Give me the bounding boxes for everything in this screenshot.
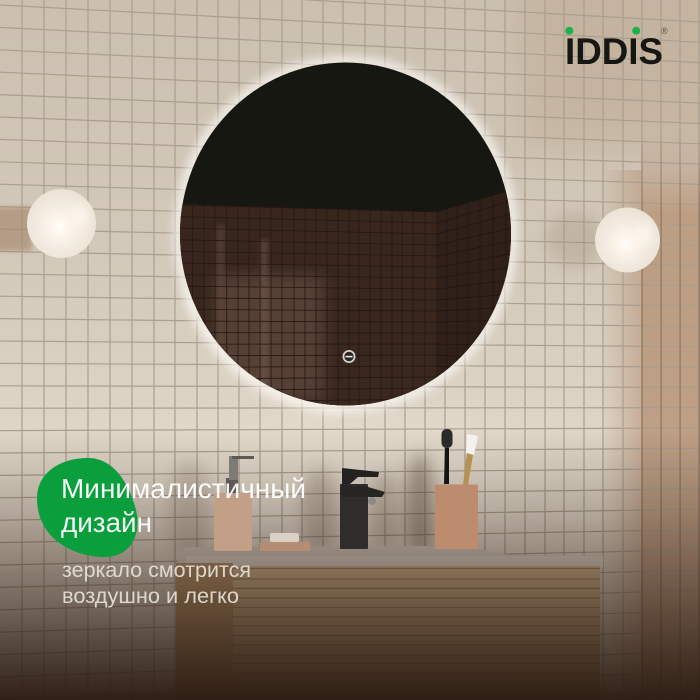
mirror reflection: side wall [437, 192, 511, 377]
heading: дизайн [61, 507, 152, 538]
vanity countertop [176, 546, 603, 568]
round mirror [170, 62, 520, 420]
mirror touch button [343, 351, 355, 362]
toothbrush: black [442, 429, 452, 484]
toothbrush: bamboo [463, 434, 478, 485]
heading: Минималистичный [61, 473, 306, 504]
subheading: зеркало смотрится [62, 559, 251, 582]
logo green dots [565, 27, 640, 35]
subheading: воздушно и легко [62, 585, 239, 608]
registered mark: ® [661, 26, 668, 36]
right wall lamp [595, 208, 660, 272]
wall shadows [0, 207, 605, 560]
green blob accent [37, 458, 138, 557]
left wall lamp [27, 189, 96, 258]
toothbrush cup [435, 484, 478, 549]
mirror reflection: back wall [180, 204, 437, 406]
soap dispenser [214, 456, 254, 551]
vanity cabinet [176, 563, 600, 700]
logo: IDDIS: IDDIS [565, 31, 663, 72]
mirror reflection: highlights [216, 225, 324, 400]
heading [61, 473, 306, 538]
soap dish [260, 533, 310, 551]
bottom dark gradient overlay [0, 430, 700, 700]
black faucet [340, 468, 385, 549]
mirror glow [178, 60, 514, 408]
subheading [62, 559, 251, 608]
